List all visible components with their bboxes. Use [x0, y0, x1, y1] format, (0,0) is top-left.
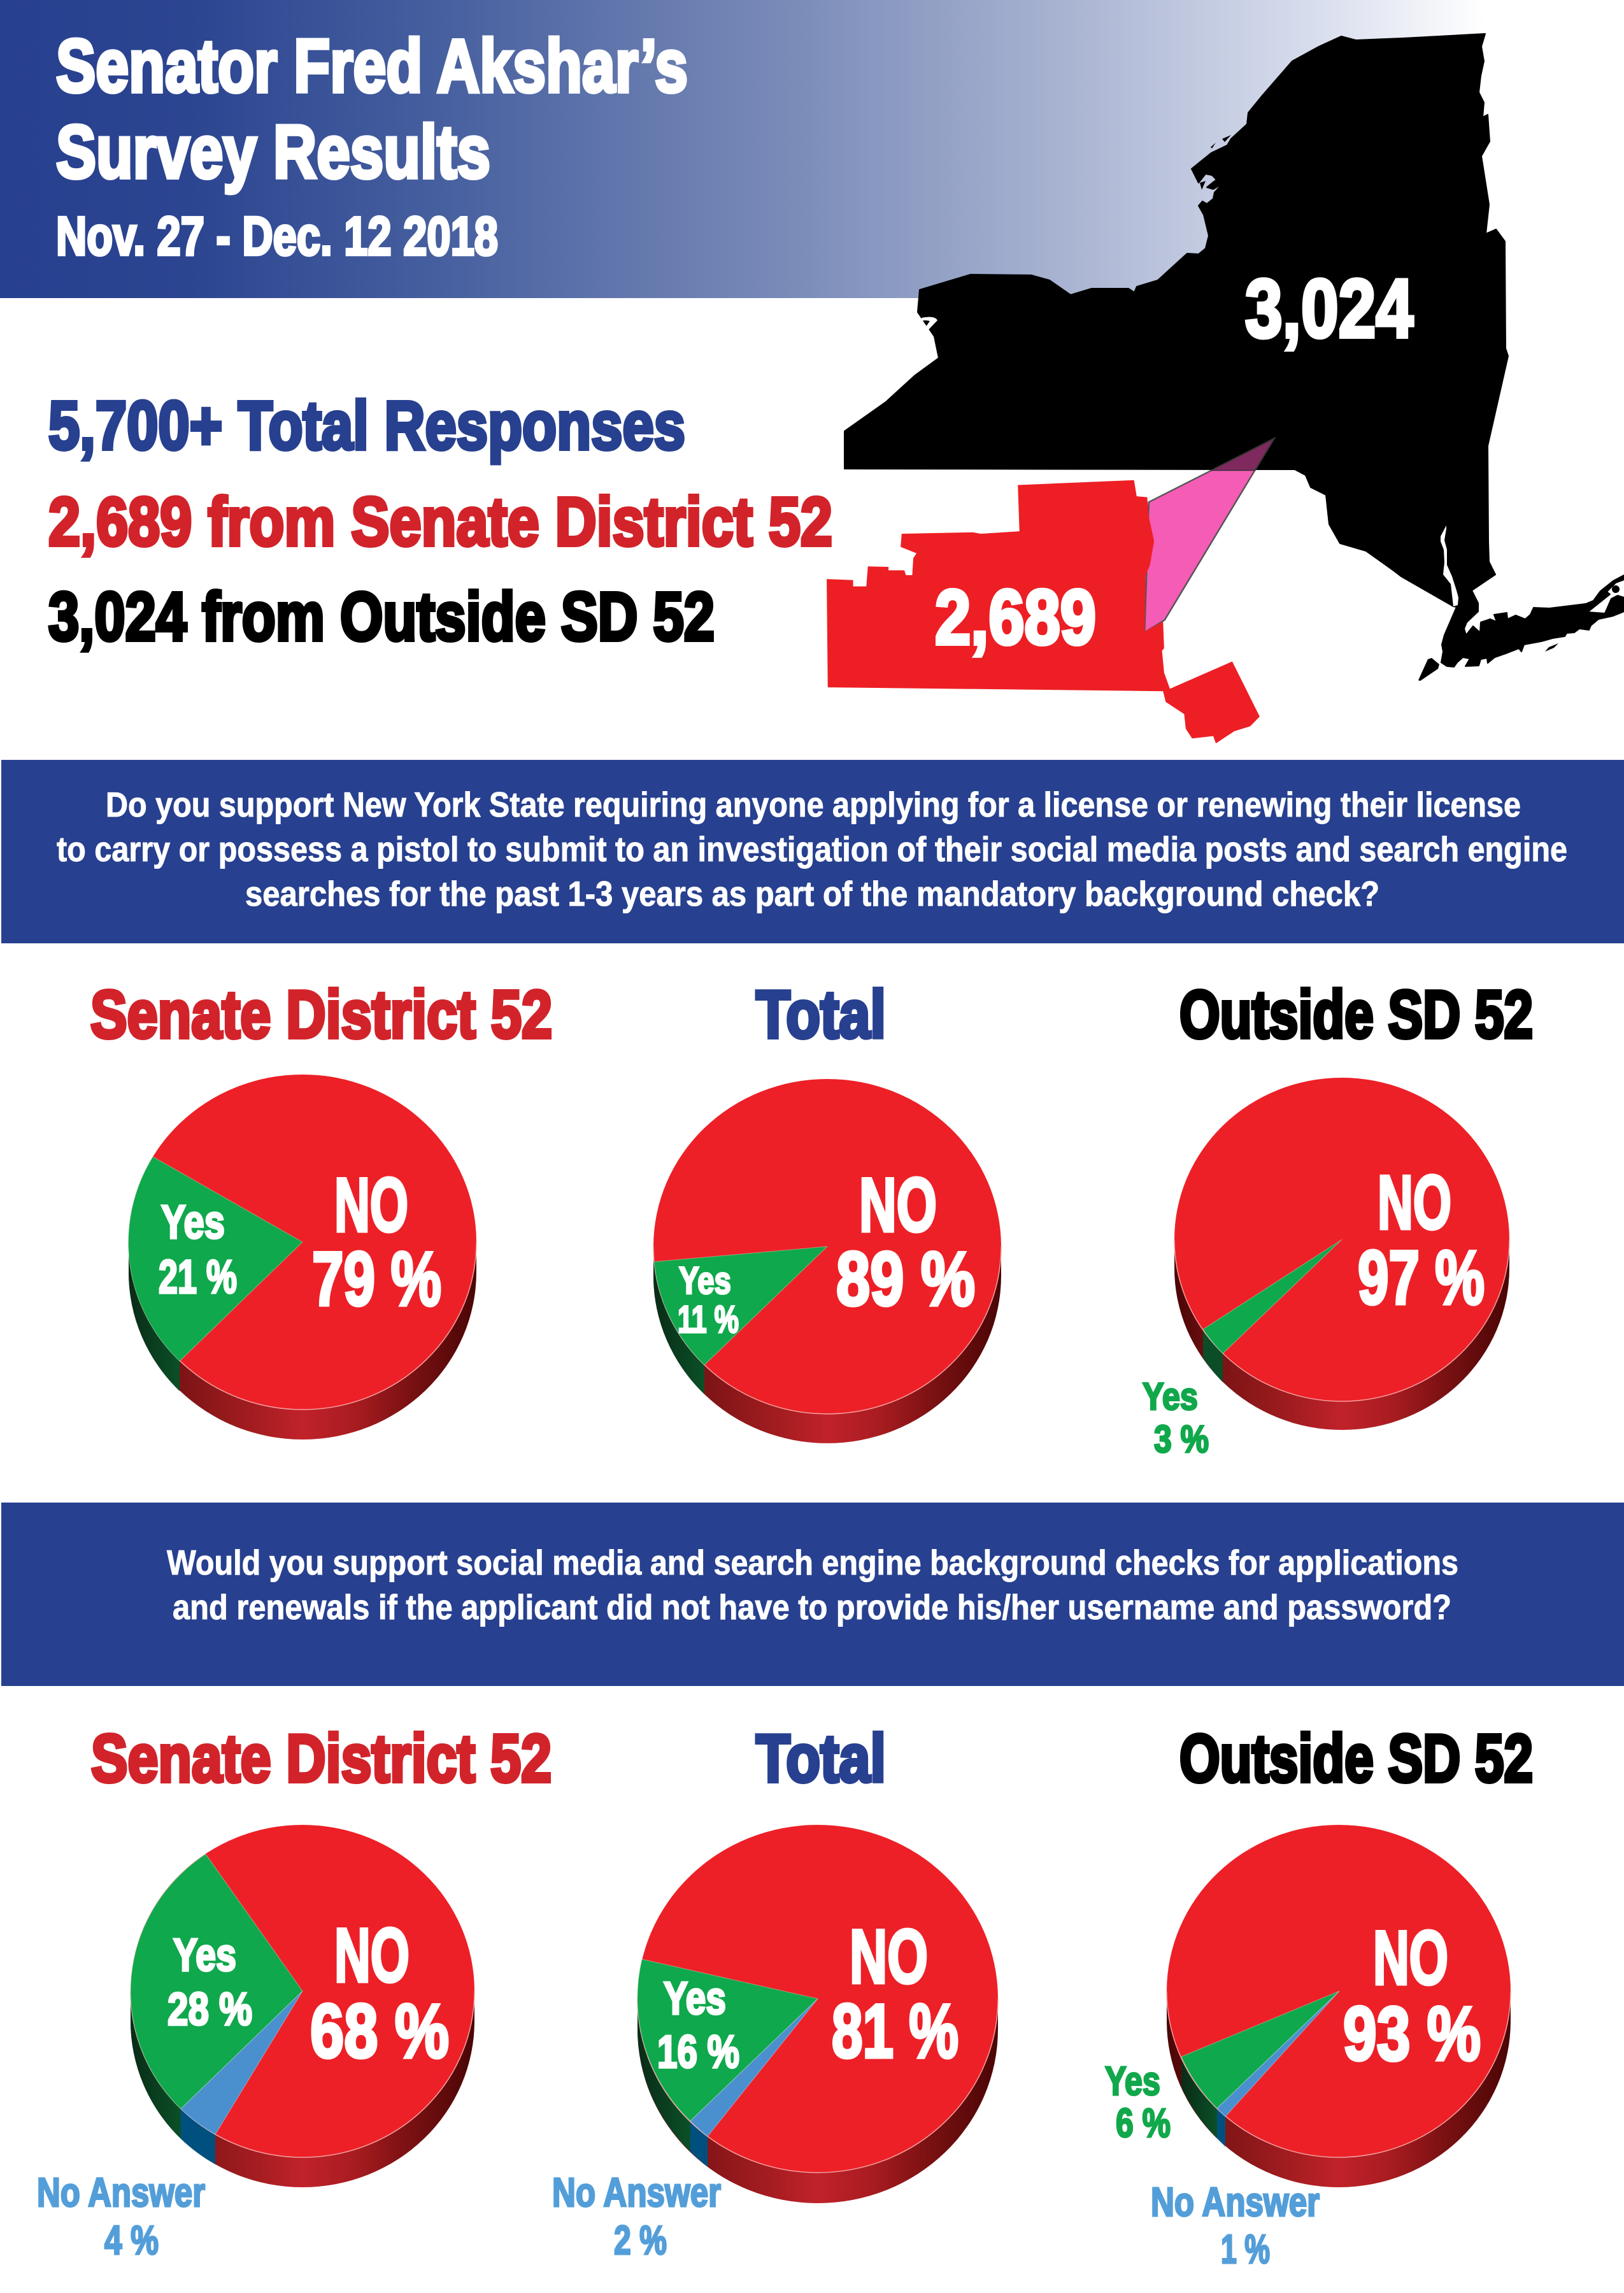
question 2 pie headings: Senate District 52: [91, 1721, 552, 1796]
response totals: 5,700+ Total Responses: [48, 387, 685, 464]
pie chart: Q2 Senate District 52: 28 %: [167, 1984, 252, 2035]
pie chart: Q1 Total: NO: [859, 1162, 937, 1248]
Senate District 52 shape: [827, 480, 1260, 743]
label: no answer 1%: No Answer: [1151, 2179, 1320, 2225]
question 1 pie headings: [90, 977, 1533, 1052]
pie chart: Q1 Total: [653, 1079, 1001, 1443]
label: yes 3%: 3 %: [1154, 1418, 1209, 1461]
question 2 pie headings: Outside SD 52: [1179, 1721, 1533, 1796]
Hudson river and Grand Island: [922, 317, 1458, 606]
pie chart: Q2 Total: 16 %: [657, 2027, 739, 2078]
question 1 pie headings: Total: [756, 977, 886, 1052]
pie chart: Q2 Senate District 52: NO: [334, 1913, 410, 1998]
question 2 pie headings: Total: [756, 1721, 886, 1796]
label: yes 6%: [1105, 2058, 1171, 2146]
label: yes 6%: 6 %: [1116, 2100, 1171, 2146]
response totals: 2,689 from Senate District 52: [48, 483, 832, 560]
label: no answer 1%: [1151, 2179, 1320, 2272]
map: New York State with Senate District 52: [827, 34, 1624, 743]
pie chart: Q1 Senate District 52: [129, 1075, 476, 1439]
pie chart: Q1 Total: Yes: [679, 1259, 731, 1302]
pie chart: Q2 Outside SD 52: 93 %: [1343, 1991, 1481, 2076]
state silhouette: [844, 34, 1624, 681]
response totals: 3,024 from Outside SD 52: [48, 578, 715, 655]
title: Senator Fred Akshar’s: [56, 24, 688, 108]
pie chart: Q2 Outside SD 52: NO: [1373, 1915, 1448, 2001]
pie chart: Q2 Total: Yes: [664, 1973, 726, 2024]
question 2 banner: and renewals if the applicant did not have to provide his/her username and password?: [173, 1587, 1451, 1627]
question 2 banner: Would you support social media and search engine background checks for applications: [167, 1543, 1458, 1582]
pie chart: Q2 Total: NO: [850, 1914, 928, 1999]
title: Survey Results: [56, 110, 490, 194]
label: no answer 2%: [552, 2169, 721, 2263]
question 1 pie headings: Senate District 52: [90, 977, 552, 1052]
pie chart: Q2 Senate District 52: [37, 1825, 474, 2263]
pie chart: Q1 Outside SD 52: NO: [1378, 1160, 1451, 1245]
map count district: 2,689: [935, 574, 1096, 661]
pie chart: Q2 Senate District 52: 68 %: [310, 1989, 449, 2074]
pink callout wedge: [827, 439, 1274, 743]
pie chart: Q2 Total: 81 %: [832, 1989, 958, 2074]
label: yes 3%: [1143, 1375, 1209, 1461]
map count outside: 3,024: [1245, 262, 1413, 355]
pie chart: Q1 Senate District 52: 21 %: [159, 1250, 237, 1303]
pie chart: Q1 Senate District 52: NO: [334, 1162, 408, 1248]
pie chart: Q1 Total: 89 %: [836, 1236, 975, 1322]
label: yes 6%: Yes: [1105, 2058, 1160, 2104]
response totals: [48, 387, 832, 655]
label: no answer 4%: [37, 2169, 205, 2263]
label: no answer 1%: 1 %: [1221, 2226, 1270, 2272]
title: Nov. 27 - Dec. 12 2018: [56, 206, 498, 267]
pie chart: Q1 Outside SD 52: 97 %: [1358, 1235, 1485, 1320]
pie chart: Q1 Outside SD 52: [1143, 1078, 1509, 1461]
question 2 banner: [1, 1503, 1624, 1686]
pie chart: Q1 Senate District 52: 79 %: [312, 1236, 441, 1322]
question 1 banner: searches for the past 1-3 years as part of the mandatory background check?: [245, 874, 1379, 913]
pie chart: Q2 Senate District 52: Yes: [173, 1930, 236, 1981]
label: yes 3%: Yes: [1143, 1375, 1198, 1418]
label: no answer 2%: 2 %: [614, 2217, 667, 2263]
pie chart: Q2 Outside SD 52: [1105, 1825, 1511, 2272]
question 1 pie headings: Outside SD 52: [1179, 977, 1533, 1052]
question 2 pie headings: [91, 1721, 1533, 1796]
title: [56, 24, 688, 267]
pie chart: Q2 Total: [552, 1825, 998, 2263]
label: no answer 2%: No Answer: [552, 2169, 721, 2215]
question 1 banner: [1, 760, 1624, 943]
label: no answer 4%: No Answer: [37, 2169, 205, 2215]
label: no answer 4%: 4 %: [104, 2217, 159, 2263]
pie chart: Q1 Senate District 52: Yes: [161, 1196, 225, 1248]
header gradient band: [0, 0, 1624, 298]
pie chart: Q1 Total: 11 %: [678, 1298, 739, 1341]
